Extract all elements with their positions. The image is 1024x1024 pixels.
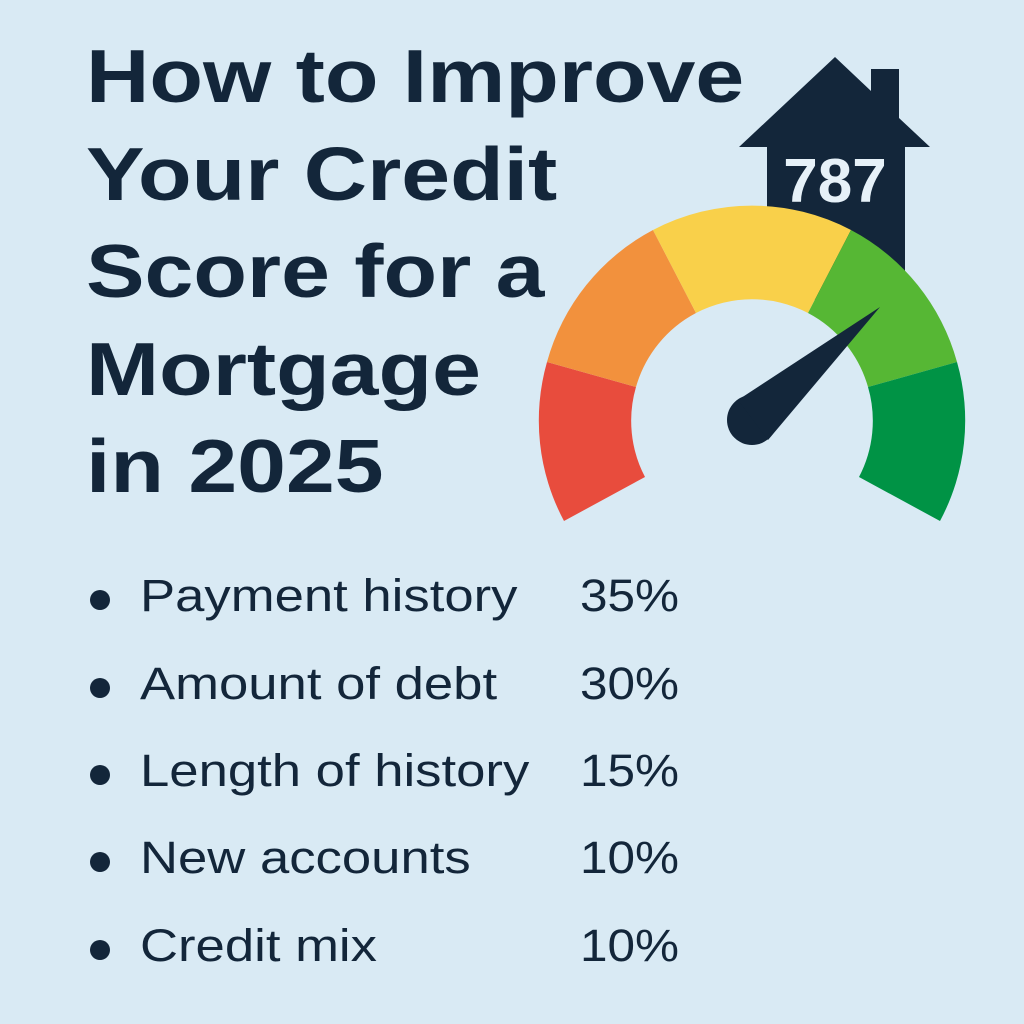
factor: amount of debt: 30% [580, 658, 679, 709]
title: How to Improve [86, 34, 744, 118]
factor: new accounts: New accounts [140, 832, 471, 883]
factor: amount of debt [90, 658, 679, 709]
factor: credit mix: 10% [580, 920, 679, 971]
factor: new accounts [90, 832, 679, 883]
gauge needle [727, 307, 880, 445]
factor: length of history: 15% [580, 745, 679, 796]
factor: payment history: Payment history [140, 570, 517, 621]
title: Score for a [86, 229, 544, 313]
factor: new accounts: 10% [580, 832, 679, 883]
title: Your Credit [86, 132, 557, 216]
factor: length of history [90, 745, 679, 796]
title [86, 34, 744, 508]
title: in 2025 [86, 424, 384, 508]
factor: payment history [90, 570, 679, 621]
factor: length of history: Length of history [140, 745, 529, 796]
gauge arcs [539, 206, 965, 521]
factor: payment history: 35% [580, 570, 679, 621]
factor: credit mix: Credit mix [140, 920, 377, 971]
icon: house with score [739, 57, 930, 300]
factor: credit mix [90, 920, 679, 971]
icon: house with score: 787 [783, 147, 887, 216]
factor: amount of debt: Amount of debt [140, 658, 497, 709]
title: Mortgage [86, 326, 481, 410]
